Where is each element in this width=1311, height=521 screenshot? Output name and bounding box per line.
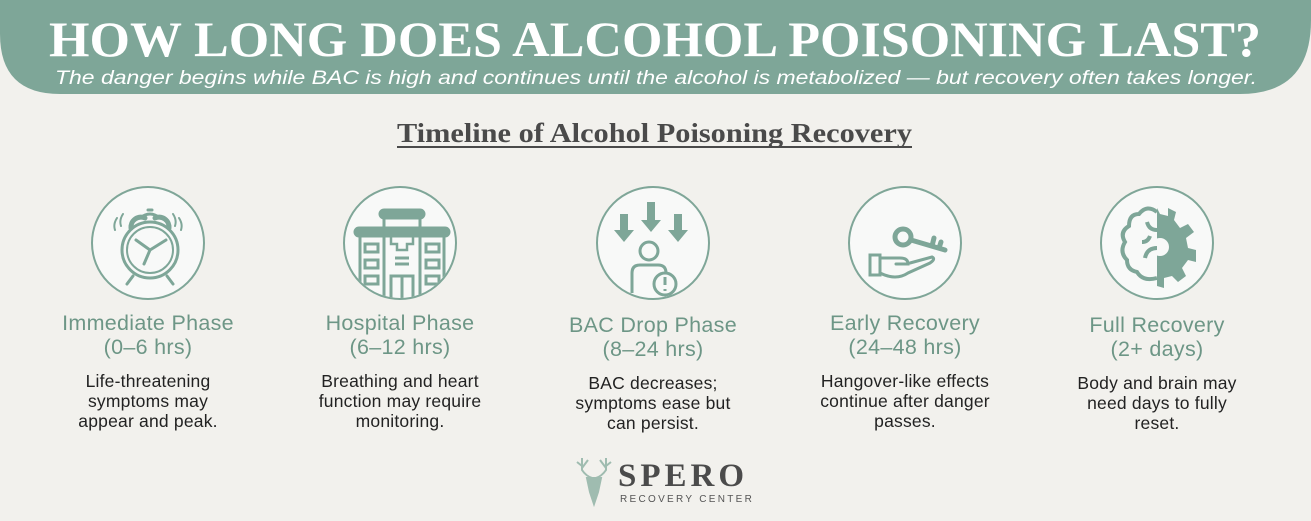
- column: hospital phase: [319, 186, 481, 431]
- column: immediate phase: [62, 186, 234, 431]
- column: early recovery: continue after danger: [820, 391, 990, 411]
- icon: hospital: [343, 186, 457, 300]
- column: full recovery: [1077, 186, 1237, 433]
- description: appear and peak.: [78, 411, 218, 431]
- icon: arrows and person: [596, 186, 710, 300]
- description: [78, 371, 218, 431]
- column: early recovery: [820, 186, 990, 431]
- column: hospital phase: monitoring.: [356, 411, 444, 431]
- column: full recovery: need days to fully: [1087, 393, 1227, 413]
- column: full recovery: (2+ days): [1111, 337, 1203, 361]
- column: hospital phase: function may require: [319, 391, 481, 411]
- column: early recovery: Early Recovery: [830, 311, 980, 335]
- column: early recovery: passes.: [874, 411, 936, 431]
- column: BAC drop phase: BAC decreases;: [588, 373, 718, 393]
- column: BAC drop phase: BAC Drop Phase: [569, 313, 737, 337]
- description: Life-threatening: [86, 371, 210, 391]
- icon: brain and gear: [1100, 186, 1214, 300]
- logo: Spero Recovery Center: RECOVERY CENTER: [620, 494, 754, 505]
- heading: (0–6 hrs): [104, 335, 192, 359]
- description: symptoms may: [88, 391, 208, 411]
- header band: [0, 0, 1311, 94]
- logo: Spero Recovery Center: SPERO: [618, 458, 748, 494]
- icon: deer head: [576, 458, 612, 507]
- column: BAC drop phase: [569, 186, 737, 433]
- section heading: Timeline of Alcohol Poisoning Recovery: [397, 118, 913, 148]
- logo: Spero Recovery Center: [576, 458, 754, 507]
- heading: [62, 311, 234, 359]
- column: BAC drop phase: can persist.: [607, 413, 699, 433]
- column: full recovery: Body and brain may: [1077, 373, 1237, 393]
- title: HOW LONG DOES ALCOHOL POISONING LAST?: [49, 11, 1261, 67]
- column: BAC drop phase: symptoms ease but: [575, 393, 731, 413]
- column: full recovery: reset.: [1135, 413, 1179, 433]
- column: BAC drop phase: (8–24 hrs): [602, 337, 704, 361]
- column: early recovery: Hangover-like effects: [821, 371, 989, 391]
- heading: Immediate Phase: [62, 311, 234, 335]
- column: hospital phase: (6–12 hrs): [350, 335, 450, 359]
- subtitle: The danger begins while BAC is high and continues until the alcohol is metabolized — but recovery often takes longer.: [55, 68, 1257, 89]
- column: early recovery: (24–48 hrs): [848, 335, 962, 359]
- column: full recovery: Full Recovery: [1089, 313, 1225, 337]
- column: hospital phase: Hospital Phase: [326, 311, 474, 335]
- icon: alarm clock: [91, 186, 205, 300]
- icon: hand with key: [848, 186, 962, 300]
- column: hospital phase: Breathing and heart: [321, 371, 479, 391]
